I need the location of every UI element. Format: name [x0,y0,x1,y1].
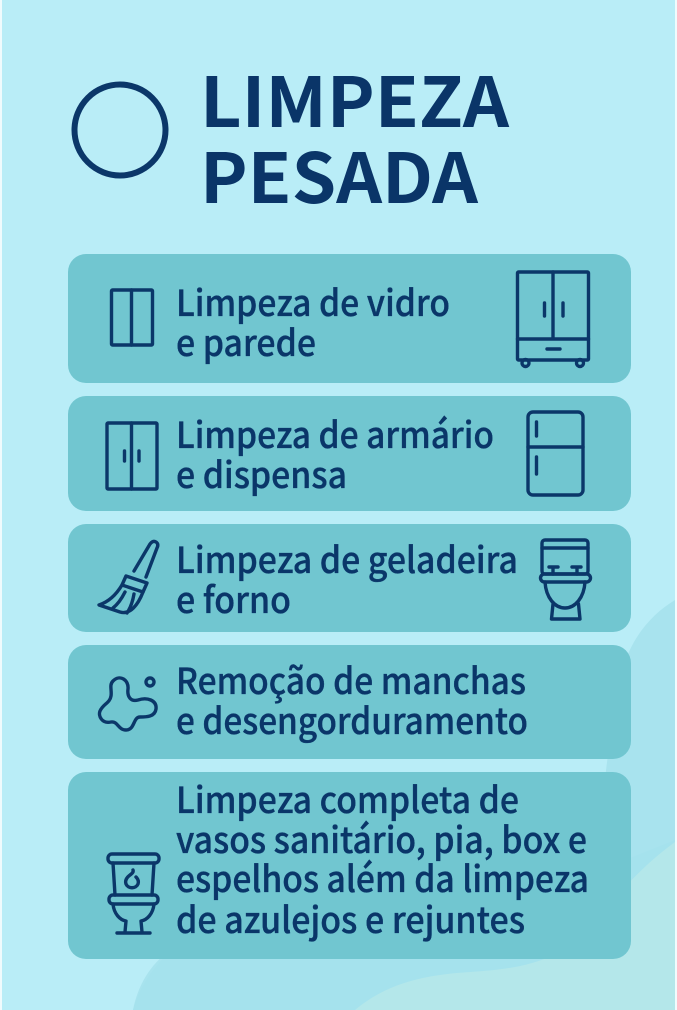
panel: vidro e parede [68,254,631,383]
text: manchas: Remoção de manchas [176,653,526,705]
text: vidro e parede: Limpeza de vidro [176,275,450,327]
panel: armario e dispensa [68,396,631,511]
panel: manchas [68,645,631,759]
icon: window [112,290,152,345]
text: manchas [176,653,528,745]
text: armario e dispensa: Limpeza de armário [176,407,494,459]
icon: toilet [540,540,590,619]
icon: cabinet [107,423,157,489]
text: limpeza completa: vasos sanitário, pia, box e [176,812,587,864]
text: geladeira e forno [176,532,518,624]
text: limpeza completa [176,772,589,944]
title [200,47,510,223]
icon: stain [99,678,156,730]
text: armario e dispensa [176,407,494,499]
panel: geladeira e forno [68,524,631,632]
title: LIMPEZA [200,47,510,147]
text: limpeza completa: espelhos além da limpeza [176,851,589,903]
text: limpeza completa: de azulejos e rejuntes [176,892,525,944]
text: vidro e parede [176,275,450,367]
icon: broom [99,541,158,613]
text: vidro e parede: e parede [176,315,316,367]
title: PESADA [200,123,479,223]
icon: fridge [528,412,583,495]
text: armario e dispensa: e dispensa [176,447,347,499]
text: geladeira e forno: e forno [176,572,291,624]
icon: empty circle [74,84,166,176]
icon: toilet with flame [108,854,159,933]
icon: wardrobe [518,272,588,366]
text: geladeira e forno: Limpeza de geladeira [176,532,518,584]
text: limpeza completa: Limpeza completa de [176,772,519,824]
text: manchas: e desengorduramento [176,693,528,745]
panel: limpeza completa [68,772,631,959]
